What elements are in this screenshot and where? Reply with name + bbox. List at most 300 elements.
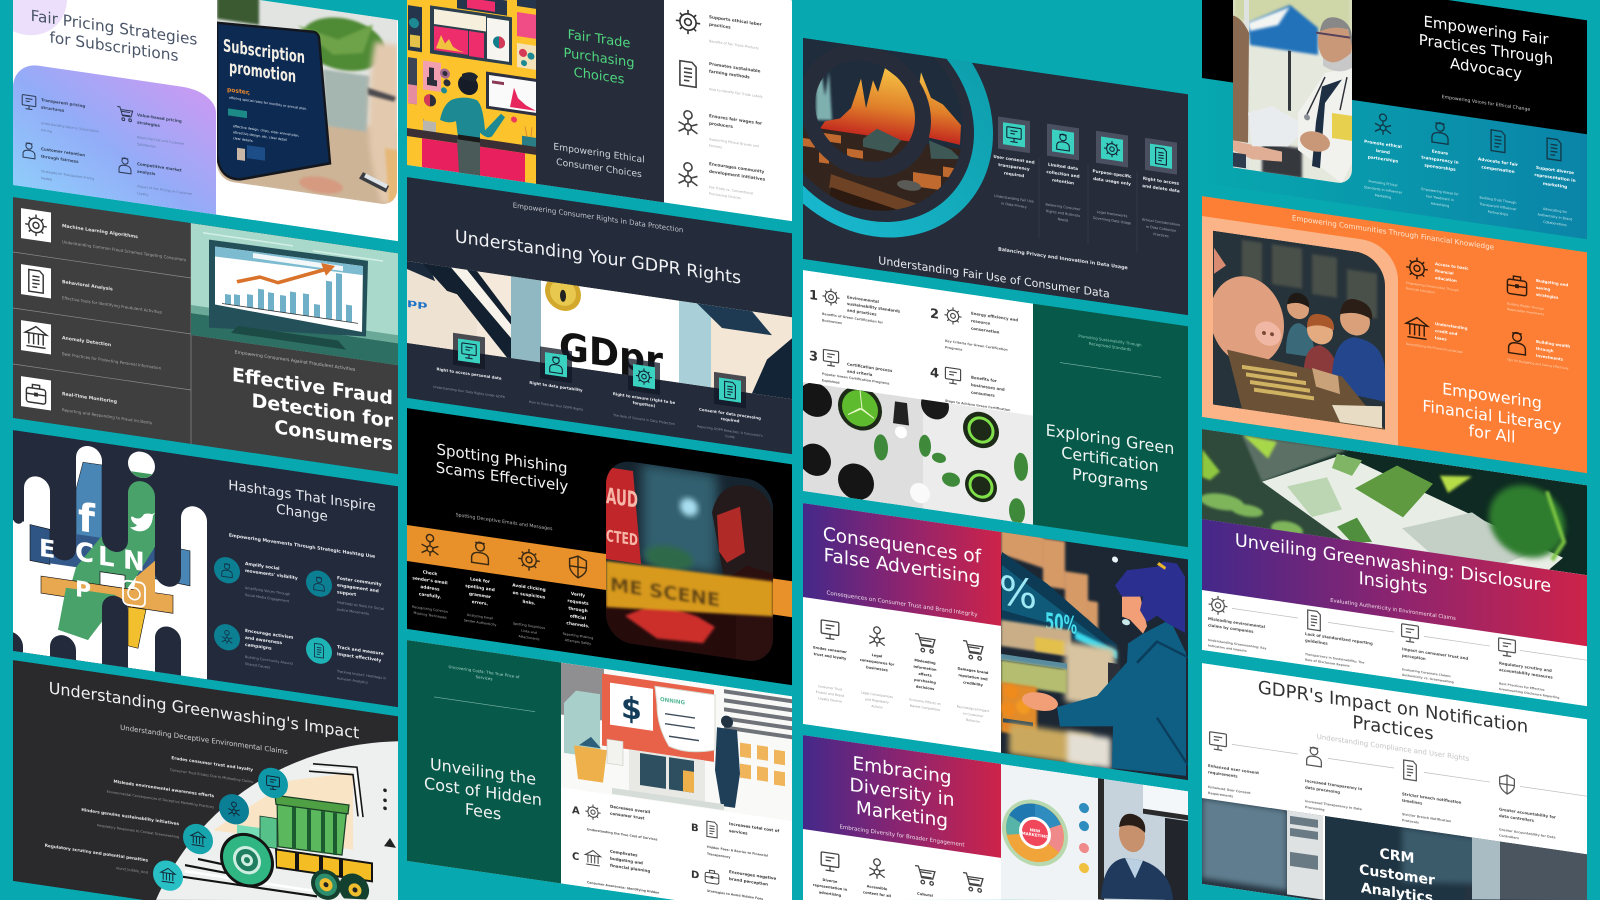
hashtag illustration: N	[123, 545, 145, 578]
tips: errors.	[472, 599, 489, 607]
subtitle: Consumer Choices	[556, 157, 642, 180]
four effects: Hidden Fees: A Barrier to Financial	[707, 845, 768, 858]
photo: CRM customer analytics: Customer	[1359, 862, 1435, 889]
four GDPR effects: Requirements	[1208, 791, 1233, 799]
numbered criteria: Popular Green Certification Programs	[822, 372, 890, 386]
four effects: A	[572, 805, 580, 817]
four disclosure issues: Regulatory scrutiny and	[1499, 660, 1552, 673]
feature list: Effective Tools for Identifying Fraudulent Activities	[62, 295, 162, 315]
slide: GDPR's Impact on Notification Practices	[1202, 663, 1587, 900]
four effects: Understanding the True Cost of Services	[587, 827, 658, 842]
subtitle: Spotting Deceptive Emails and Messages	[456, 512, 553, 532]
four rights columns: The Role of Consent in Data Protection	[612, 413, 675, 426]
dark centre panel	[536, 0, 664, 203]
feature list	[13, 197, 191, 444]
photo: GDPR sign	[407, 252, 792, 403]
four effects: financial planning	[610, 863, 650, 874]
four rights columns: Right to access personal data	[436, 366, 502, 381]
illustration: family with piggy bank	[1210, 230, 1385, 430]
slide: Empowering Fair Practices Through Advocacy	[1202, 0, 1587, 239]
timeline nodes: Regulatory scrutiny and potential penalties	[45, 843, 148, 863]
four principle columns: Practices	[1153, 232, 1169, 238]
four effects: B	[691, 823, 699, 835]
diversity items: Diverse	[823, 878, 838, 884]
photo: leaves and report	[1200, 429, 1587, 581]
four rights columns	[433, 330, 763, 443]
four GDPR effects: Enhanced User Consent	[1208, 785, 1251, 795]
financial topics: Responsible Investments	[1507, 307, 1545, 317]
four GDPR effects: requirements	[1208, 769, 1238, 779]
four principle columns: in Data Collection	[1146, 225, 1176, 233]
diversity items: advertising	[819, 890, 842, 898]
tips: requests	[567, 598, 589, 607]
title: for Subscriptions	[50, 28, 178, 65]
title: Detection for	[252, 389, 394, 433]
photo: fraud scene: ME SCENE	[610, 573, 720, 612]
photo: CRM customer analytics	[1202, 798, 1587, 900]
illustration: shopper at grocery: 50%	[1045, 607, 1077, 640]
four disclosure issues: Role of Disclosure Reports	[1305, 658, 1350, 668]
illustration: hidden fees store: $	[621, 690, 642, 728]
advocacy columns: Ensure	[1432, 149, 1448, 156]
slide: Empowering Financial Literacy	[1202, 196, 1587, 473]
tips: channels.	[566, 620, 590, 630]
numbered criteria: and practices	[847, 307, 877, 317]
list of four items	[214, 555, 386, 687]
tips: on suspicious	[513, 590, 546, 601]
list of four items: engagement and	[337, 582, 379, 594]
ringed circular image	[753, 0, 993, 254]
benefits list: Promotes sustainable	[709, 61, 761, 74]
title: Change	[276, 501, 328, 525]
title: False Advertising	[824, 545, 980, 589]
numbered criteria: Benefits for	[971, 375, 997, 383]
dark green panel	[1033, 304, 1188, 547]
four GDPR effects: Processing	[1305, 805, 1325, 812]
tips: address	[420, 584, 440, 593]
four disclosure issues: Impact on consumer trust and	[1402, 646, 1468, 661]
feature list: Understanding Common Fraud Schemes Targeting Consumers	[62, 239, 186, 262]
four consequences: purchasing	[914, 678, 936, 685]
diversity items: representation in	[813, 883, 848, 892]
tips: Attempts Safely	[565, 638, 591, 646]
photo: tablet with subscription promotion: clear details.	[233, 136, 254, 143]
title: Understanding Fair Use of Consumer Data	[878, 254, 1110, 301]
financial topics: Empowering Communities Through	[1406, 281, 1459, 292]
financial topics: Building Wealth Through	[1507, 302, 1544, 311]
title: Unveiling Greenwashing: Disclosure	[1235, 531, 1551, 597]
four principle columns: and delete data	[1142, 183, 1180, 194]
panel items: structures	[41, 105, 65, 113]
four effects: brand perception	[729, 876, 768, 887]
photo: tablet with subscription promotion: Subscription	[223, 36, 305, 68]
benefits list: Fair Trade vs. Conventional	[709, 185, 753, 196]
illustration: shopper at grocery: %	[999, 568, 1037, 619]
four principle columns: transparency	[998, 162, 1030, 172]
slide: Consequences of False Advertising	[803, 498, 1188, 780]
four consequences: Erosion and Brand	[816, 690, 844, 698]
financial topics: Tips for Budgeting and Saving Effectively	[1506, 357, 1569, 371]
subtitle: Recognized Standards	[1089, 341, 1131, 352]
numbered criteria: Success	[945, 405, 959, 411]
list of four items: Social Media Engagement	[245, 593, 290, 603]
list of four items: movements' visibility	[245, 568, 298, 582]
timeline nodes: Consumer Trust Erodes Due to Misleading Claims	[170, 768, 253, 784]
title: Spotting Phishing	[436, 440, 568, 477]
subtitle: Embracing Diversity for Broader Engagement	[839, 824, 965, 849]
four consequences: Behavior	[966, 718, 981, 724]
four consequences	[813, 618, 990, 725]
four principle columns: in Data Privacy	[1001, 201, 1027, 209]
financial topics: financial	[1435, 268, 1454, 276]
benefits list: Purchasing Choices	[709, 192, 741, 200]
diversity items	[813, 850, 983, 900]
four consequences: credibility	[963, 680, 984, 687]
dark green panel	[407, 640, 561, 883]
title: Advocacy	[1450, 54, 1522, 83]
illustration: hidden fees store	[561, 662, 792, 821]
title: Practices	[1352, 712, 1434, 745]
four principle columns: data usage only	[1093, 176, 1131, 186]
financial topics: loans	[1435, 335, 1447, 342]
panel items: Models	[41, 176, 53, 182]
illustration: hidden fees store: ONNING	[660, 697, 685, 707]
panel items: Pricing	[41, 128, 52, 134]
financial topics: Building wealth	[1536, 339, 1570, 349]
financial topics: Access to basic	[1435, 261, 1469, 271]
slide: Effective Fraud Detection	[13, 197, 398, 474]
numbered criteria: 3	[809, 349, 818, 365]
four rights columns: Consent for data processing	[699, 407, 761, 421]
four effects: Decreases overall	[610, 804, 651, 815]
list of four items: Building Community Around	[245, 655, 293, 666]
title: Unveiling the	[430, 754, 536, 789]
four disclosure issues: guidelines	[1305, 638, 1328, 646]
subtitle: Promoting Sustainability Through	[1078, 333, 1142, 348]
list of four items: Activism Analytics	[337, 676, 368, 685]
photo: man with marketing wheel	[1001, 764, 1188, 900]
financial topics: through	[1536, 346, 1554, 353]
illustration: person viewing charts	[407, 0, 536, 184]
advocacy columns: Collaborations	[1543, 220, 1567, 227]
four consequences: reputation and	[958, 673, 988, 682]
four disclosure issues: perception	[1402, 653, 1426, 661]
gradient band	[1202, 519, 1587, 646]
benefits list: Supports ethical labor	[709, 14, 763, 27]
four GDPR effects: Protocols	[1402, 818, 1419, 825]
subtitle: Understanding Deceptive Environmental Claims	[120, 723, 288, 756]
panel items: Value-based pricing	[137, 112, 182, 124]
subtitle: Consequences on Consumer Trust and Brand Integrity	[827, 590, 978, 619]
four GDPR effects: Increased Transparency in Data	[1305, 799, 1362, 811]
photo: tablet with subscription promotion: offering special rates for monthly or annual plan.	[229, 96, 307, 111]
four effects: Transparency	[707, 852, 730, 859]
illustration: shopper at grocery	[999, 527, 1188, 780]
title: Understanding Your GDPR Rights	[455, 227, 741, 289]
hashtag illustration: P	[75, 576, 91, 604]
benefits list	[676, 8, 766, 204]
photo: CRM customer analytics: CRM	[1380, 846, 1414, 867]
numbered criteria: and criteria	[847, 368, 873, 377]
slide: Exploring Green Certification Programs	[798, 269, 1188, 549]
benefits list: Ensures fair wages for	[709, 113, 763, 126]
slide: Fair Trade Purchasing Choices	[407, 0, 792, 221]
tips: Recognizing Common	[412, 605, 448, 614]
four effects: Encourages negative	[729, 869, 777, 881]
title: Purchasing	[563, 46, 635, 71]
numbered criteria: sustainability standards	[847, 301, 901, 314]
benefits list: Supporting Ethical Brands and	[709, 137, 759, 148]
tips: Spotting Suspicious	[513, 621, 545, 630]
subtitle: Empowering Communities Through Financial Knowledge	[1292, 213, 1495, 252]
subtitle: Empowering Voices for Ethical Change	[1442, 94, 1530, 113]
tips: official	[570, 613, 587, 622]
subheading: Balancing Privacy and Innovation in Data Usage	[998, 247, 1129, 272]
advocacy columns: Transparent Influencer	[1479, 202, 1517, 211]
advocacy columns: compensation	[1481, 164, 1515, 174]
subheading: Empowering Movements Through Strategic Hashtag Use	[229, 533, 375, 560]
hashtag illustration	[13, 436, 207, 680]
benefits list: Encourages community	[709, 161, 764, 174]
hashtag illustration: C	[75, 537, 94, 570]
four consequences: on Consumer	[963, 711, 984, 718]
financial topics: Financial Education	[1406, 286, 1435, 295]
timeline nodes: Regulatory Responses to Combat Greenwashing	[97, 823, 179, 839]
financial topics: saving	[1536, 285, 1551, 292]
title: Hashtags That Inspire	[228, 477, 376, 515]
panel items	[22, 93, 193, 203]
tips: Attachments	[519, 634, 540, 641]
timeline nodes: round_bubble_land	[116, 866, 148, 875]
numbered criteria: Environmental	[847, 294, 880, 304]
title: for All	[1469, 421, 1515, 447]
photo: green tech wall	[798, 371, 1033, 527]
four consequences: Legal Consequences	[861, 690, 893, 699]
subtitle: Empowering Consumer Rights in Data Protection	[513, 200, 683, 234]
numbered criteria: Benefits of Green Certification for	[822, 312, 883, 325]
hashtag illustration: f	[78, 496, 96, 543]
benefits list: producers	[709, 121, 733, 129]
financial topics: investments	[1536, 353, 1564, 362]
four disclosure issues	[1208, 594, 1587, 704]
four principle columns: retention	[1052, 177, 1074, 186]
list of four items: support	[337, 589, 356, 598]
slide: Hashtags That Inspire Change	[13, 430, 398, 708]
numbered criteria: Key Criteria for Green Certification	[945, 339, 1008, 352]
subtitle: Empowering Consumers Against Fraudulent Activities	[235, 349, 356, 373]
tips: Verify	[571, 591, 585, 599]
title: Diversity in	[850, 775, 954, 811]
four effects: C	[572, 851, 579, 863]
financial topics: education	[1435, 275, 1457, 283]
four rights columns: Understanding Your Data Rights Under GDPR	[433, 385, 506, 399]
advocacy columns: Advocating for	[1543, 207, 1568, 214]
four consequences: affects	[918, 672, 932, 678]
tips: carefully.	[419, 591, 442, 601]
title: Consumers	[274, 415, 393, 455]
numbered criteria: Businesses	[822, 318, 842, 325]
four disclosure issues: Misleading environmental	[1208, 616, 1266, 629]
tips: spelling and	[465, 583, 495, 593]
four consequences: Actions	[871, 704, 883, 710]
timeline nodes: Environmental Consequences of Deceptive Marketing Practices	[107, 790, 214, 809]
four GDPR effects: Stricter breach notification	[1402, 791, 1462, 805]
title: Programs	[1072, 464, 1148, 494]
peach panel	[1202, 216, 1398, 446]
subtitle: Empowering Ethical	[553, 141, 645, 166]
photo: fraud scene	[606, 458, 773, 666]
numbered criteria	[809, 285, 1018, 420]
feature list: Best Practices for Protecting Personal Information	[62, 351, 162, 371]
four principle columns: Governing Data Usage	[1093, 216, 1131, 225]
financial topics: Demystifying the Financial Landscape	[1406, 342, 1463, 354]
four effects: Consumer Awareness: Identifying Hidden	[587, 880, 659, 895]
list of four items: impact effectively	[337, 651, 381, 664]
title: Financial Literacy	[1422, 396, 1562, 436]
four effects: Complicates	[610, 849, 638, 858]
four rights columns: Right to data portability	[529, 380, 583, 393]
title: Cost of Hidden	[424, 774, 542, 810]
advocacy columns: sponsorships	[1424, 162, 1456, 172]
advocacy columns: Promoting Ethical	[1369, 179, 1398, 188]
advocacy columns: Partnerships	[1488, 210, 1508, 217]
tips: Phishing Techniques	[413, 611, 447, 620]
gradient header	[803, 503, 1001, 626]
four consequences: Legal	[872, 653, 882, 659]
slide: Unveiling Greenwashing Disclosure Insights	[1200, 429, 1587, 706]
photo: man with marketing wheel: MARKETING	[1022, 830, 1048, 839]
four effects: consumer trust	[610, 811, 644, 821]
title: Empowering	[1442, 379, 1542, 413]
numbered criteria: 1	[809, 288, 818, 304]
subtitle: Uncovering Costs: The True Price of	[449, 664, 520, 679]
title: Certification	[1061, 443, 1159, 476]
panel items: Understanding Value in Subscription	[41, 121, 99, 134]
benefits list: Benefits of Fair Trade Products	[709, 39, 759, 50]
numbered criteria: Steps to Achieve Green Certification	[945, 399, 1011, 412]
four rights columns: Right to erasure (right to be	[613, 391, 675, 405]
list of four items: Encourage activism	[245, 628, 294, 641]
title: Practices Through	[1419, 31, 1553, 68]
four disclosure issues: Understanding Greenwashing: Key	[1208, 638, 1267, 650]
subtitle: Evaluating Authenticity in Environmental Claims	[1330, 598, 1456, 622]
financial topics	[1406, 256, 1570, 371]
benefits list: development initiatives	[709, 169, 766, 182]
title: Fair Pricing Strategies	[31, 7, 197, 49]
title: Choices	[574, 65, 625, 88]
four disclosure issues: Evaluating Corporate Claims:	[1402, 667, 1451, 678]
gradient header	[803, 735, 1001, 858]
four effects: services	[729, 828, 748, 836]
title: Embracing	[852, 753, 952, 789]
hashtag illustration: L	[98, 542, 115, 574]
illustration: green tractor	[156, 741, 398, 900]
four GDPR effects: Increased transparency in	[1305, 778, 1362, 791]
four principle columns: Purpose-specific	[1093, 168, 1132, 179]
numbered criteria: businesses and	[971, 382, 1005, 392]
four consequences: and Regulatory	[865, 697, 889, 705]
feature list: Anomaly Detection	[62, 335, 111, 348]
slide: Unveiling the Cost of Hidden Fees	[407, 640, 792, 900]
panel items: analysis	[137, 169, 156, 176]
advocacy columns: Support diverse	[1536, 165, 1574, 175]
four consequences: trust and loyalty	[814, 652, 847, 661]
financial topics: strategies	[1536, 292, 1559, 300]
diversity items: content for all	[863, 890, 891, 898]
feature list: Real-Time Monitoring	[62, 391, 117, 405]
benefits list: How to Identify Fair Trade Labels	[709, 87, 763, 99]
subtitle: Understanding Compliance and User Rights	[1317, 732, 1470, 763]
panel items: Balancing Cost and Customer	[137, 135, 185, 146]
slide: Understanding Your GDPR Rights	[407, 177, 792, 454]
title: Fees	[465, 800, 501, 824]
four rights columns: Guide	[725, 434, 735, 439]
four principle columns	[993, 116, 1180, 258]
four disclosure issues: Best Practices for Effective	[1499, 681, 1545, 692]
four principle columns: Understanding Fair Use	[994, 194, 1034, 204]
numbered criteria: Programs	[945, 345, 962, 352]
numbered criteria: Explained	[822, 378, 840, 385]
tips: grammar	[469, 591, 492, 600]
tips: links.	[522, 599, 536, 607]
advocacy columns: brand	[1376, 148, 1390, 155]
benefits list: farming methods	[709, 69, 750, 80]
feature list: Machine Learning Algorithms	[62, 223, 138, 240]
title: Exploring Green	[1046, 421, 1174, 458]
four effects: Charges	[587, 886, 601, 892]
photo: tablet with subscription promotion: promotion	[229, 58, 296, 87]
timeline nodes: Misleads environmental awareness efforts	[113, 779, 214, 798]
four rights columns: required	[721, 416, 740, 424]
tips: Links and	[521, 629, 537, 635]
four principle columns: Balancing Consumer	[1045, 202, 1081, 212]
four principle columns: Rights and Business	[1046, 209, 1080, 218]
title: Effective Fraud	[232, 363, 393, 409]
panel items: Transparent pricing	[41, 97, 85, 109]
advocacy columns: Advocate for fair	[1478, 156, 1519, 167]
four principle columns: User consent and	[993, 154, 1035, 165]
list of four items: Justice Movements	[336, 607, 369, 616]
tips	[412, 568, 593, 649]
panel items: Competitive market	[137, 161, 182, 173]
subtitle: Services	[476, 674, 492, 681]
four consequences: Market Competition	[910, 704, 940, 712]
tips: Look for	[470, 576, 491, 585]
diversity items: Cultural	[917, 892, 933, 898]
photo: fraud scene: AUD	[606, 483, 638, 514]
four consequences: businesses	[866, 665, 888, 672]
hashtag illustration: E	[39, 534, 55, 564]
four GDPR effects: data controllers	[1499, 813, 1535, 823]
timeline nodes: Hinders genuine sustainability initiatives	[81, 807, 179, 826]
slide: Understanding Fair Use of Consumer Data	[753, 0, 1188, 315]
four rights columns: forgotten)	[633, 400, 656, 408]
photo: tablet with subscription promotion: effective design, chips, clear annual plan,	[233, 124, 299, 138]
list of four items: Amplifying Voices Through	[245, 586, 290, 596]
tips: Avoid clicking	[512, 582, 546, 593]
timeline nodes: Erodes consumer trust and loyalty	[171, 755, 253, 772]
gradient panel	[13, 62, 216, 215]
four effects: D	[691, 870, 699, 882]
advocacy columns: Fair Treatment in	[1426, 194, 1454, 202]
numbered criteria: 4	[930, 366, 939, 382]
list of four items: Foster community	[337, 575, 382, 588]
numbered criteria: consumers	[971, 390, 995, 398]
orange band with icons	[407, 525, 792, 617]
panel items: Strategies for Transparent Pricing	[41, 169, 94, 181]
four effects	[572, 798, 779, 900]
tips: Sender Authenticity	[464, 618, 496, 627]
